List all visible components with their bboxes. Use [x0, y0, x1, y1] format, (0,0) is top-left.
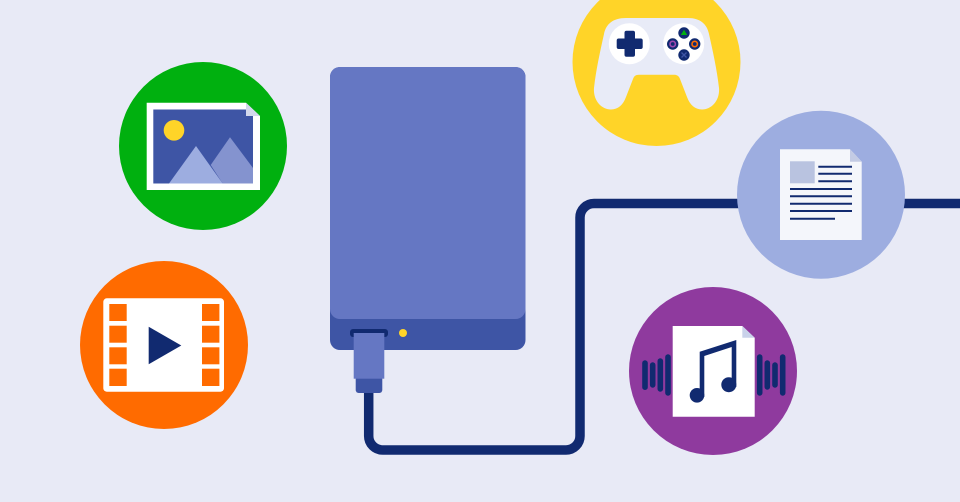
icon: document file	[737, 111, 905, 279]
cable	[369, 204, 960, 450]
icon: video file	[80, 261, 248, 429]
icon: game controller	[572, 0, 740, 146]
icon: music file	[629, 287, 797, 455]
usb connector	[354, 333, 384, 393]
hard drive	[330, 67, 526, 350]
icon: photo file	[119, 62, 287, 230]
